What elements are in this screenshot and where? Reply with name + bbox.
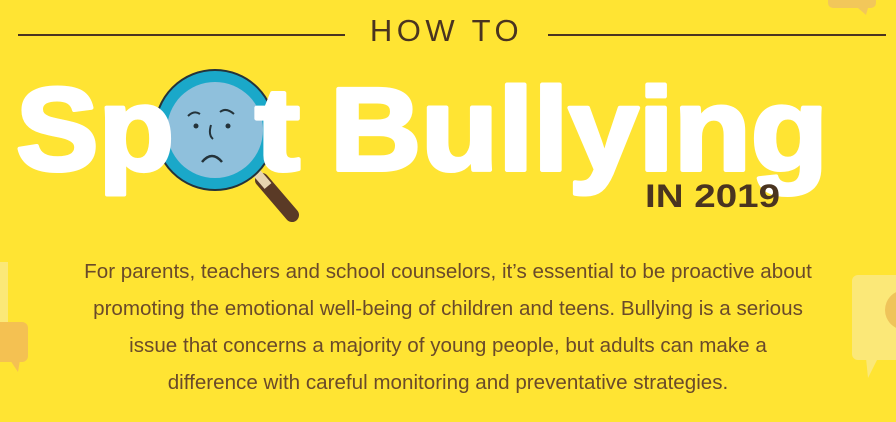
icon: magnifier with sad face — [155, 70, 292, 215]
intro paragraph: difference with careful monitoring and preventative strategies. — [168, 371, 728, 394]
bubble: top right — [828, 0, 876, 15]
bubble: right — [852, 275, 896, 378]
title: Spot Bullying with magnifier — [16, 64, 828, 222]
intro paragraph: For parents, teachers and school counselors, it’s essential to be proactive about — [84, 260, 812, 283]
title: Spot Bullying with magnifier: Bullying — [330, 64, 828, 196]
intro paragraph — [84, 260, 812, 394]
title: Spot Bullying with magnifier: t — [255, 64, 300, 196]
subtitle: in 2019: IN 2019 — [645, 178, 780, 214]
intro paragraph: issue that concerns a majority of young people, but adults can make a — [129, 334, 767, 357]
intro paragraph: promoting the emotional well-being of children and teens. Bullying is a serious — [93, 297, 803, 320]
bubble: left — [0, 262, 28, 372]
header: how to: HOW TO — [370, 13, 523, 48]
title: Spot Bullying with magnifier: Sp — [16, 64, 174, 196]
